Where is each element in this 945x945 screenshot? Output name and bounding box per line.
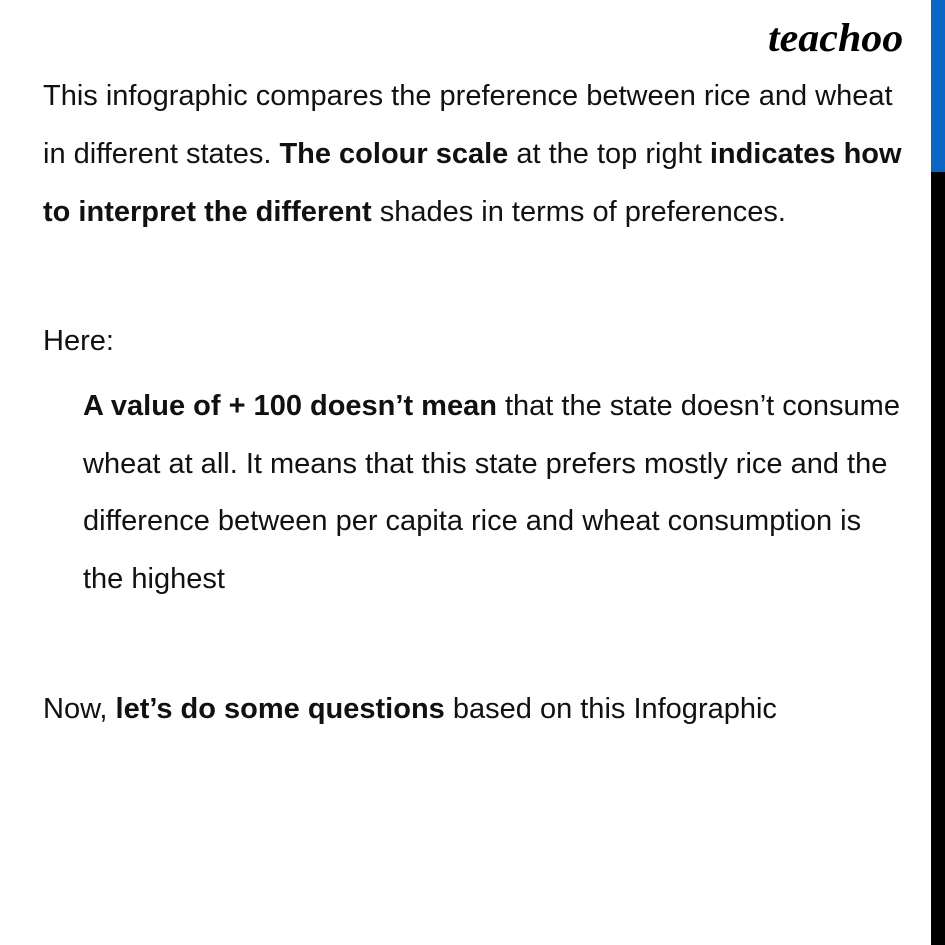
text block: explanation: the highest xyxy=(83,563,225,595)
scrollbar xyxy=(931,0,945,945)
text block: intro: This infographic compares the preference between rice and wheat xyxy=(43,80,893,112)
text block: intro xyxy=(43,80,902,228)
text block: explanation xyxy=(83,390,900,595)
text block: intro: in different states. The colour scale at the top right indicates how xyxy=(43,138,902,170)
text block: explanation: A value of + 100 doesn’t mean that the state doesn’t consume xyxy=(83,390,900,422)
text block: explanation: wheat at all. It means that this state prefers mostly rice and the xyxy=(83,448,887,480)
text block: explanation: difference between per capita rice and wheat consumption is xyxy=(83,505,861,537)
text: closing line: Now, let’s do some questions based on this Infographic xyxy=(43,693,777,725)
logo: teachoo: teachoo xyxy=(768,15,903,60)
text block: intro: to interpret the different shades in terms of preferences. xyxy=(43,196,786,228)
text: Here: Here: xyxy=(43,325,114,357)
